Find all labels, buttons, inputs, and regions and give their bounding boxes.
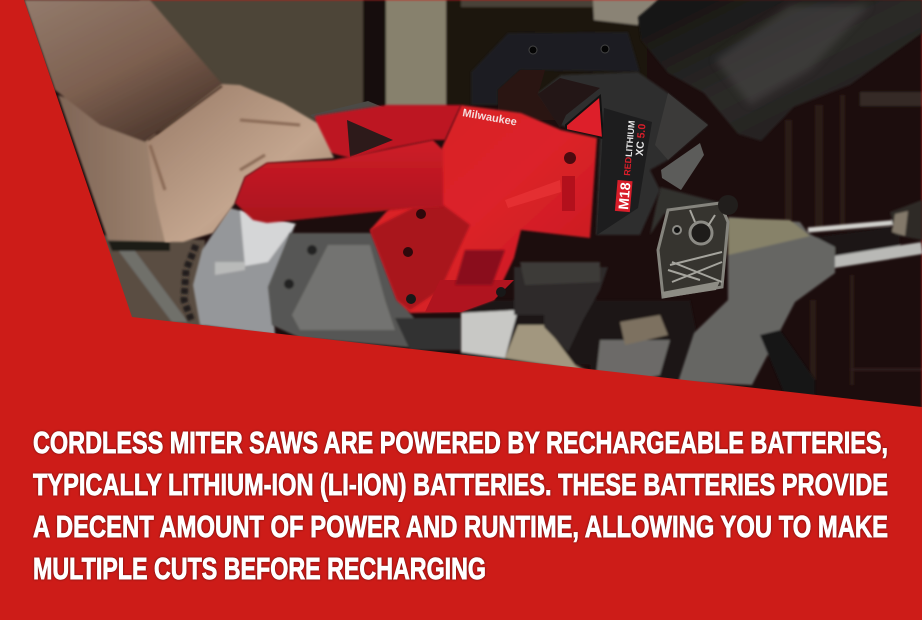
bracket with ribs — [650, 187, 738, 298]
battery label text: RED — [622, 156, 634, 176]
battery label text — [615, 120, 649, 213]
arm — [24, 0, 222, 242]
line 4: MULTIPLE CUTS BEFORE RECHARGING — [33, 551, 486, 586]
black carry handle — [471, 32, 640, 120]
floor and bar under the blade — [100, 235, 205, 330]
grey grinder strip behind handle — [310, 101, 385, 122]
body text — [33, 425, 888, 586]
hand — [147, 84, 334, 242]
brand text on body: Milwaukee — [461, 107, 518, 129]
glove — [638, 0, 922, 141]
battery label text: M18 — [615, 182, 633, 210]
lower black mount and hardware — [461, 262, 700, 385]
red saw body — [315, 105, 597, 313]
fin — [661, 143, 704, 190]
red handle grip — [235, 140, 443, 223]
saw guard — [268, 233, 461, 350]
saw blade — [184, 208, 296, 335]
battery label text: LITHIUM — [624, 120, 637, 157]
photo background: wall and wood cabinets — [0, 0, 922, 420]
photo: miter saw in use — [0, 0, 922, 420]
battery pack — [538, 72, 708, 235]
base casting with rails — [678, 200, 922, 395]
battery label text: XC 5.0 — [634, 123, 649, 156]
